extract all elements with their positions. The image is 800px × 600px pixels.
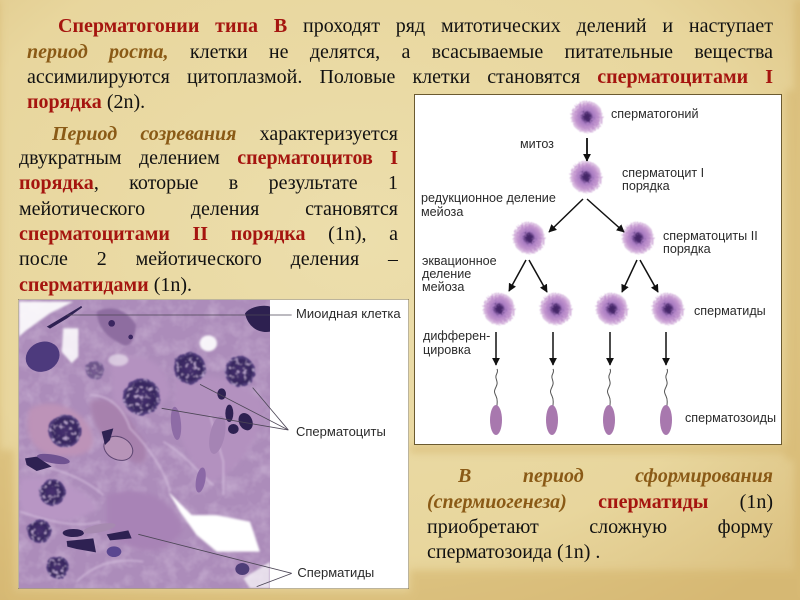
text block: spermiogenesis: В период сформирования <box>458 465 773 487</box>
text block: maturation period: Период созревания характеризуется <box>52 123 398 145</box>
micrograph labels: Миоидная клетка <box>296 306 401 321</box>
sperm cells <box>490 369 672 435</box>
text block: growth period: период роста, клетки не делятся, а всасываемые питательные вещества <box>27 41 773 63</box>
diagram labels: порядка <box>622 179 670 193</box>
text block: growth period: Сперматогонии типа В проходят ряд митотических делений и наступает <box>58 15 773 37</box>
micrograph: testis tissue <box>18 299 409 589</box>
leader lines <box>67 315 292 587</box>
diagram labels: мейоза <box>422 280 464 294</box>
diagram labels: митоз <box>520 137 554 151</box>
diagram labels: деление <box>422 267 471 281</box>
micrograph labels: Сперматиды <box>297 565 374 580</box>
diagram labels: сперматозоиды <box>685 411 776 425</box>
micrograph labels <box>296 306 401 580</box>
text block: spermiogenesis <box>427 465 773 563</box>
text block: maturation period <box>19 123 398 296</box>
diagram: stages of spermatogenesis <box>414 94 782 445</box>
diagram labels: редукционное деление <box>421 191 556 205</box>
text block: growth period <box>27 15 773 113</box>
tissue area <box>19 300 270 588</box>
cells: secondary spermatocytes <box>513 222 654 254</box>
text block: spermiogenesis: (спермиогенеза) сперматиды (1n) <box>427 491 773 513</box>
diagram labels: мейоза <box>421 205 463 219</box>
text block: growth period: ассимилируются цитоплазмой. Половые клетки становятся сперматоцитами I <box>27 66 773 88</box>
cell: spermatogonium <box>571 101 603 133</box>
text block: spermiogenesis: сперматозоида (1n) . <box>427 541 600 563</box>
diagram labels: сперматогоний <box>611 107 698 121</box>
spermatid and dark nuclei <box>25 307 256 557</box>
diagram labels: порядка <box>663 242 711 256</box>
text block: maturation period: после 2 мейотического деления – <box>19 248 398 270</box>
diagram labels: сперматоциты II <box>663 229 758 243</box>
text block: spermiogenesis: приобретают сложную форму <box>427 516 773 538</box>
arrows <box>496 138 666 365</box>
micrograph labels: Сперматоциты <box>296 424 386 439</box>
text block: maturation period: двукратным делением сперматоцитов I <box>19 147 398 169</box>
diagram labels: цировка <box>423 343 471 357</box>
diagram labels: сперматоцит I <box>622 166 704 180</box>
text block: maturation period: мейотического деления становятся <box>19 198 398 220</box>
cells: spermatids <box>483 293 684 325</box>
diagram labels: сперматиды <box>694 304 766 318</box>
diagram labels: дифферен- <box>423 329 490 343</box>
text block: maturation period: порядка, которые в результате 1 <box>19 172 398 194</box>
text block: maturation period: сперматидами (1n). <box>19 274 192 296</box>
text block: growth period: порядка (2n). <box>27 91 145 113</box>
diagram labels: эквационное <box>422 254 497 268</box>
cell: primary spermatocyte <box>570 161 602 193</box>
text block: maturation period: сперматоцитами II порядка (1n), а <box>19 223 398 245</box>
nuclei <box>21 306 270 579</box>
diagram labels <box>421 107 776 425</box>
